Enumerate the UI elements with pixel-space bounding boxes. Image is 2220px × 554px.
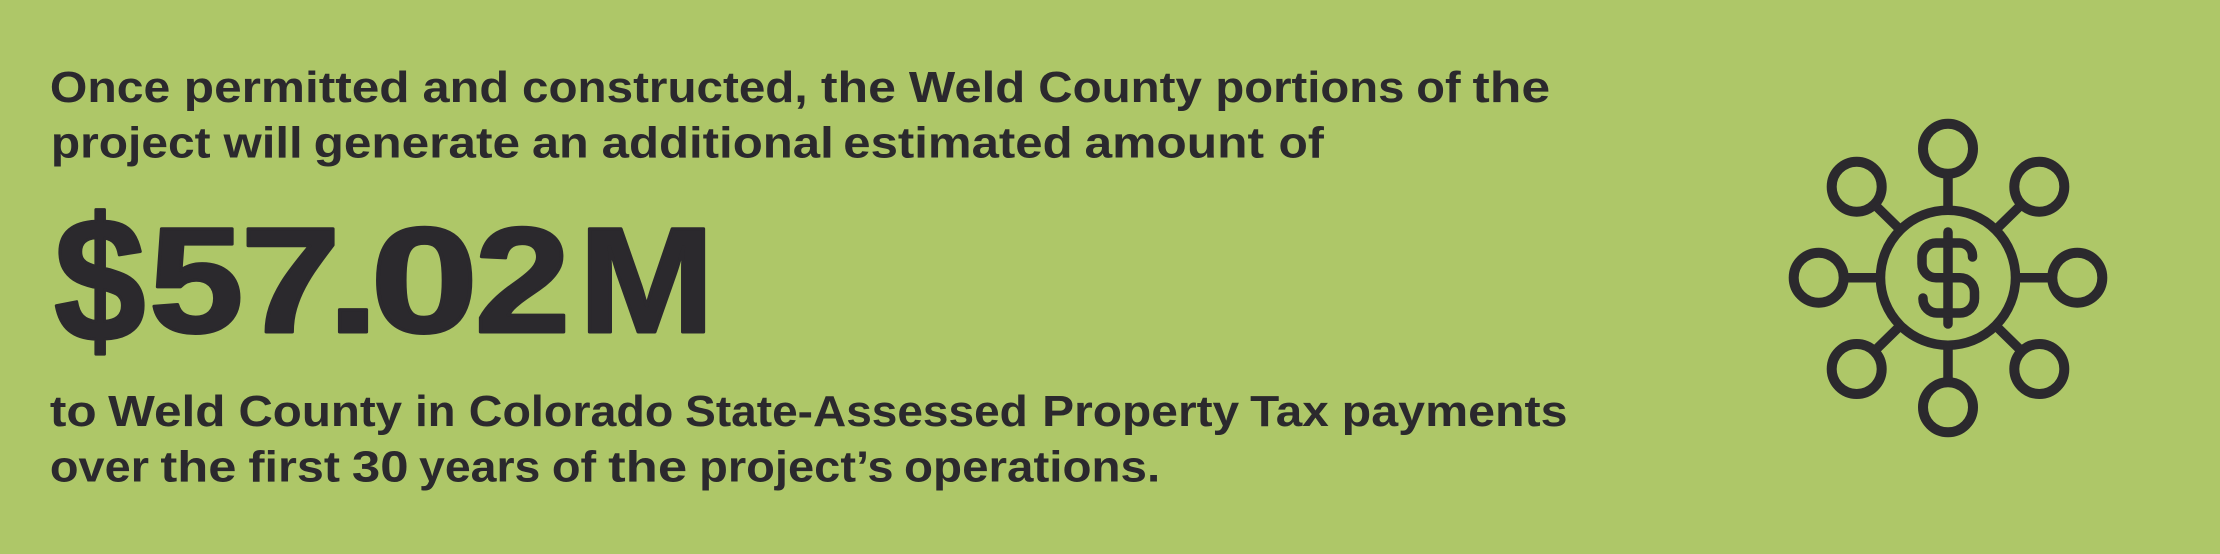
intro text: permitted (184, 63, 410, 112)
closing text: in (415, 387, 455, 436)
big number: . (327, 196, 379, 364)
closing text: Property (1042, 387, 1240, 436)
intro text: will (222, 118, 303, 168)
closing text: over (50, 442, 149, 492)
intro text: of (1416, 63, 1461, 112)
intro text: portions (1215, 63, 1404, 112)
closing text: Weld (108, 387, 226, 436)
icon: dollar sign (1922, 232, 1974, 324)
closing text: payments (1342, 387, 1568, 436)
closing text: to (50, 387, 97, 436)
intro text: additional (602, 118, 834, 168)
closing text: the (160, 442, 236, 492)
closing text: project’s (699, 442, 894, 492)
big number: $ (54, 182, 146, 379)
intro text: estimated (843, 118, 1073, 168)
closing text: years (419, 442, 540, 492)
intro text: Weld (909, 63, 1025, 112)
intro text: the (821, 63, 896, 112)
closing text: of (552, 442, 597, 492)
closing text: County (238, 387, 403, 436)
central circle (1880, 210, 2016, 345)
intro text: and (422, 63, 509, 112)
closing text: operations. (904, 442, 1160, 492)
connectors (1845, 175, 2051, 381)
closing text (50, 387, 1568, 492)
intro text: constructed, (522, 63, 808, 112)
intro text: project (51, 118, 211, 168)
closing text: Colorado (469, 387, 673, 436)
closing text: the (608, 442, 687, 492)
big number: M (579, 197, 714, 365)
closing text: first (248, 442, 340, 492)
intro text: an (532, 118, 589, 168)
outer nodes (1794, 124, 2102, 432)
closing text: 30 (352, 442, 409, 492)
big number: 2 (475, 197, 570, 364)
big number: 5 (149, 196, 244, 364)
icon: money network (1794, 124, 2102, 432)
big number: 7 (241, 197, 341, 365)
big number (54, 182, 714, 379)
intro text: generate (314, 118, 520, 168)
intro text: County (1038, 63, 1202, 112)
intro text: Once (50, 63, 170, 112)
intro text: the (1472, 63, 1550, 112)
intro text: amount (1084, 118, 1264, 168)
big number: 0 (370, 196, 478, 364)
closing text: State-Assessed (685, 387, 1028, 436)
closing text: Tax (1250, 387, 1329, 436)
intro text (50, 63, 1550, 168)
intro text: of (1278, 118, 1324, 168)
